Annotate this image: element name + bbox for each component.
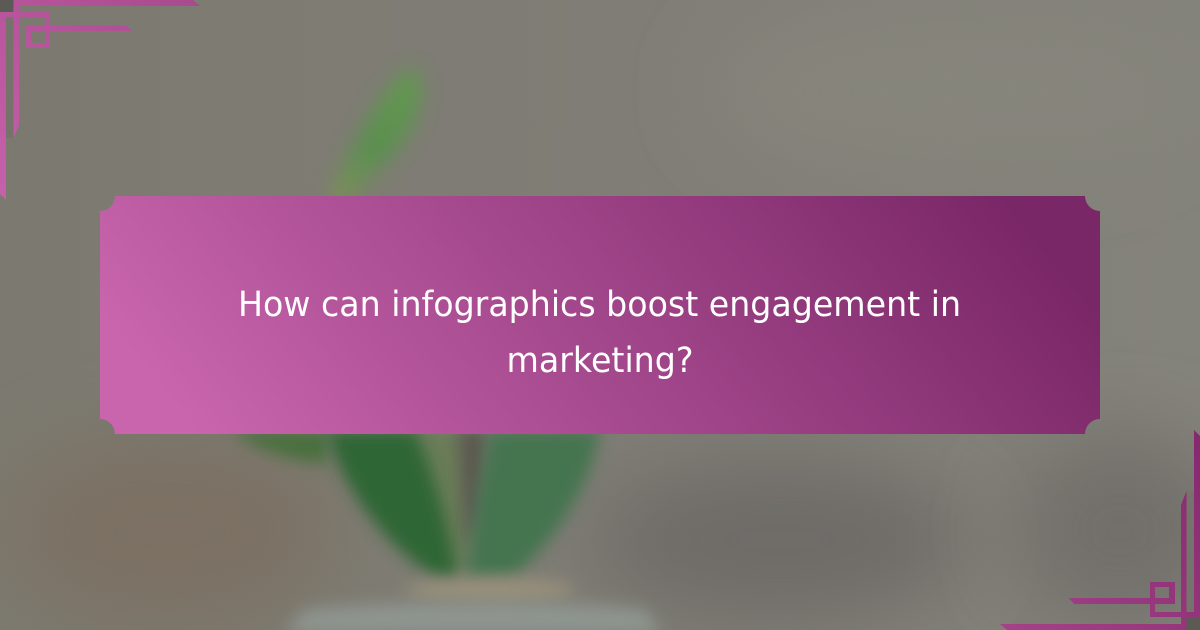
corner ornament: bottom right xyxy=(1000,430,1200,630)
title: marketing? xyxy=(506,341,694,381)
corner ornament: top left xyxy=(0,0,200,200)
plant: stem xyxy=(458,430,488,550)
plant: pale leaf edge xyxy=(400,430,470,570)
plant: right lower leaf xyxy=(466,430,600,582)
plant pot xyxy=(284,602,662,630)
banner panel xyxy=(100,196,1100,434)
title: How can infographics boost engagement in xyxy=(238,285,961,325)
soil xyxy=(405,577,575,603)
title xyxy=(238,285,961,381)
plant: left small leaf xyxy=(232,430,330,465)
plant: upper leaf xyxy=(330,68,422,205)
plant: left lower leaf xyxy=(328,430,458,582)
